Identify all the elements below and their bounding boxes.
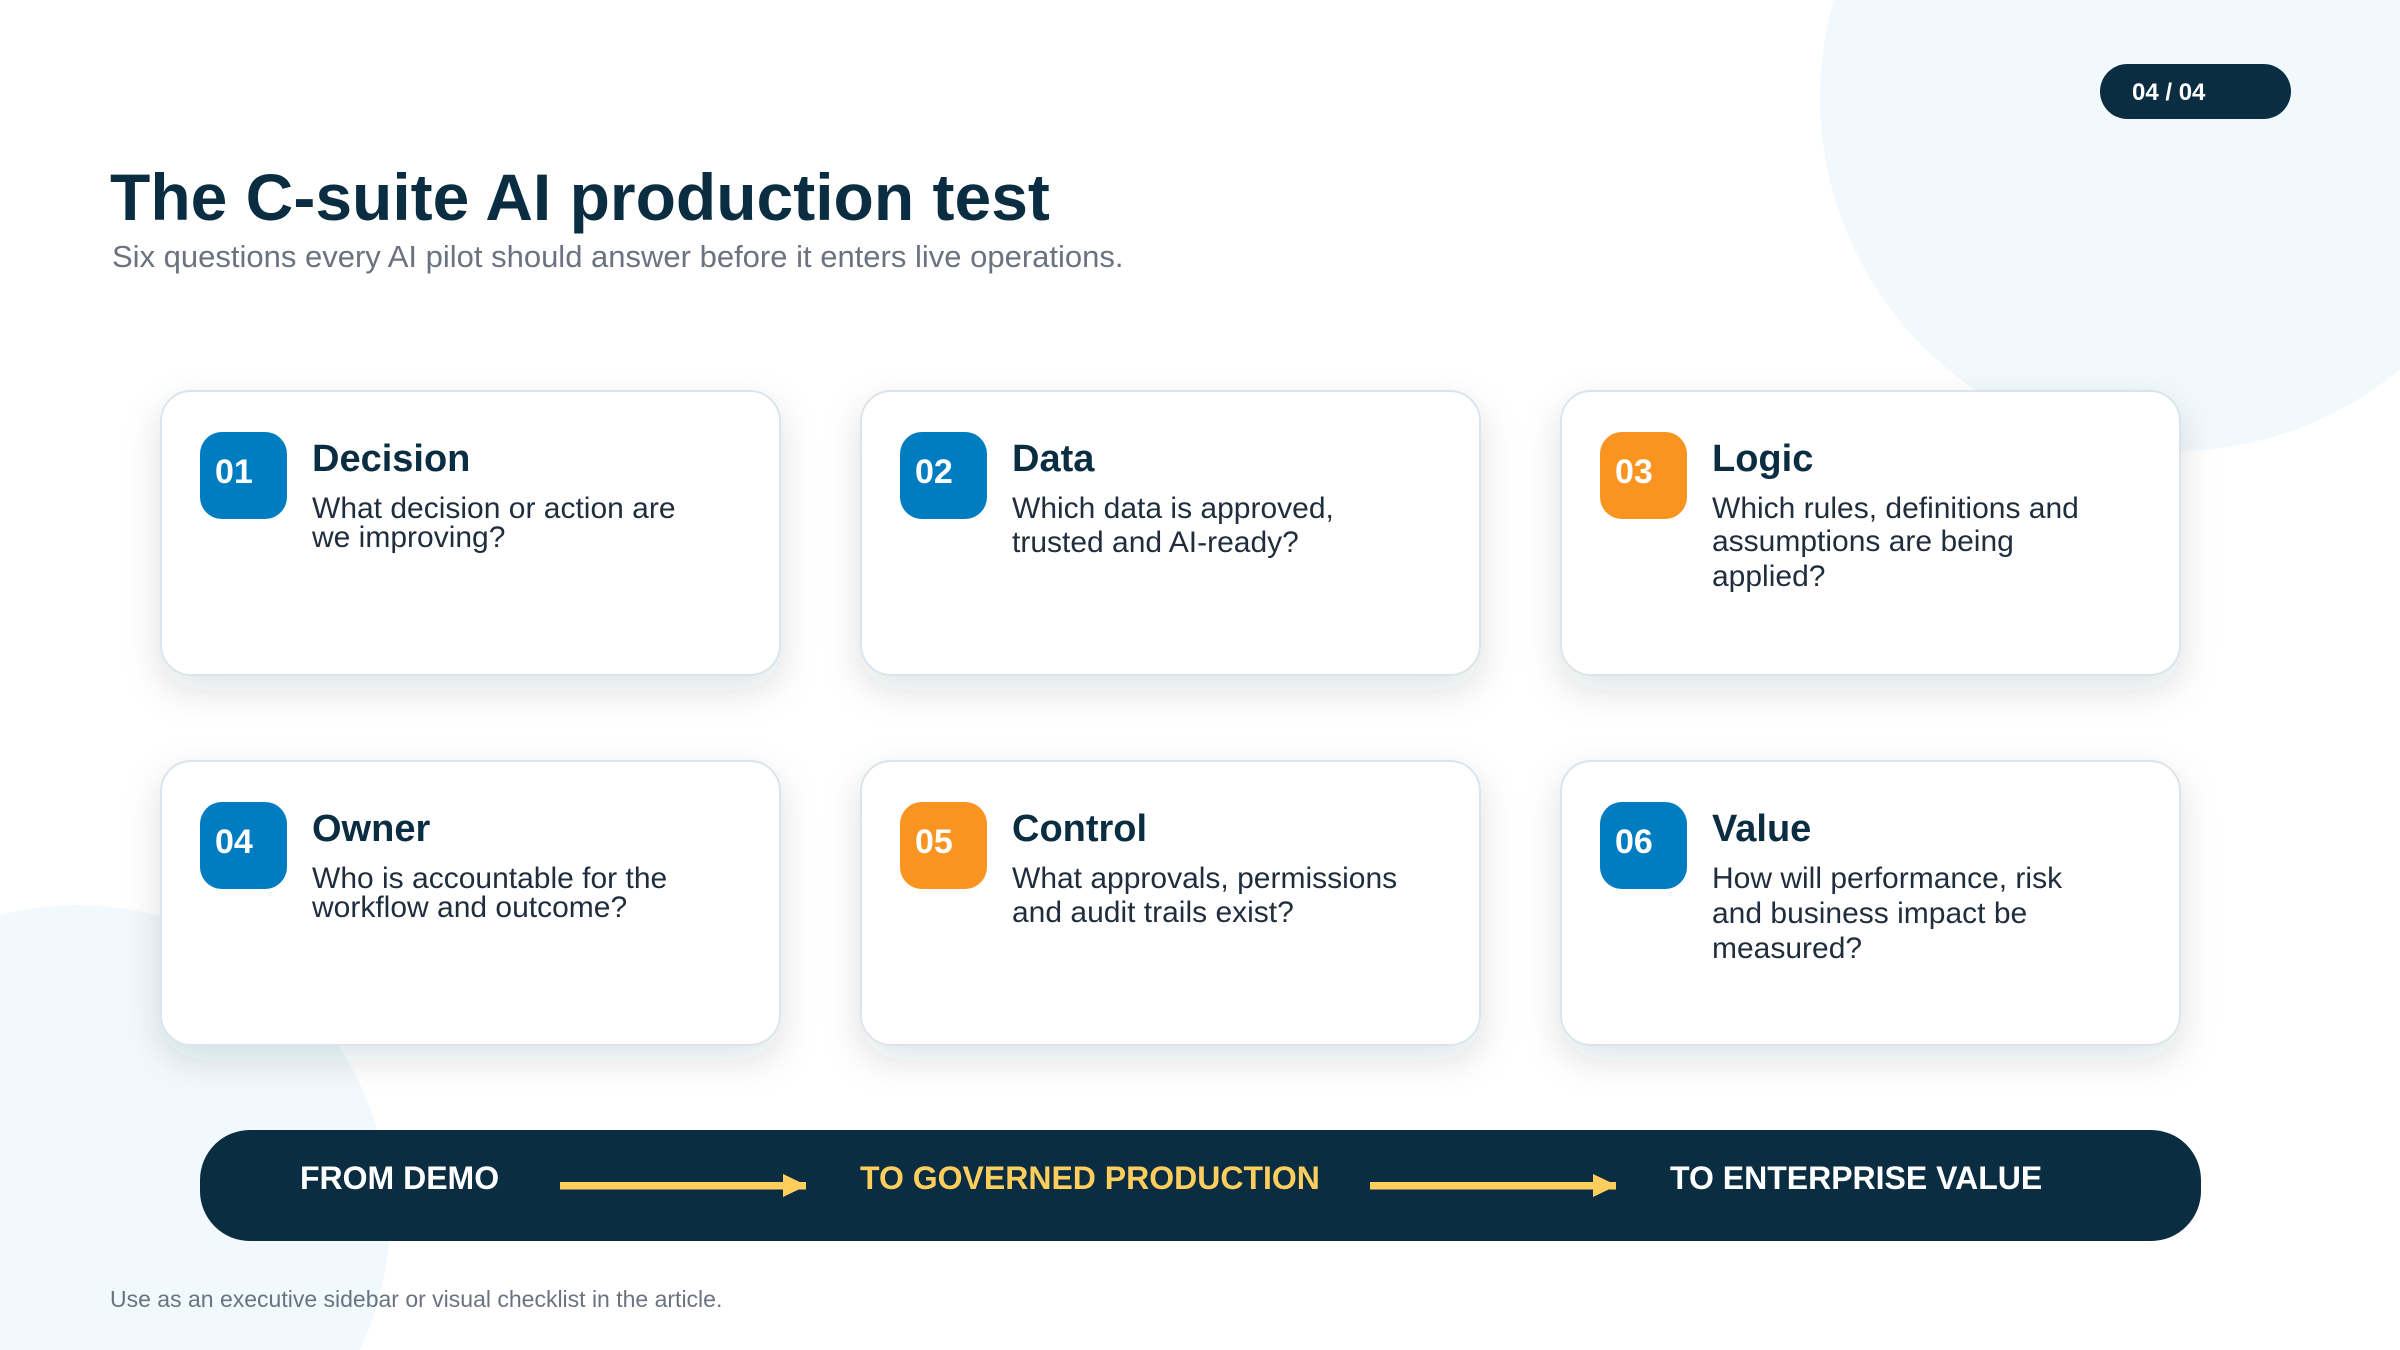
- card: 02 Data: [861, 391, 1480, 675]
- card: 01 Decision: [161, 391, 780, 675]
- card: 03 Logic: 03: [1615, 453, 1653, 491]
- label: to enterprise value: TO ENTERPRISE VALUE: [1670, 1160, 2042, 1196]
- card: 06 Value: How will performance, risk: [1712, 862, 2063, 895]
- arrow 2: [1370, 1174, 1616, 1197]
- card: 03 Logic: [1561, 391, 2180, 675]
- background circle: bottom left: [0, 905, 390, 1350]
- label: to governed production: TO GOVERNED PRODUCTION: [860, 1160, 1320, 1196]
- label: from demo: FROM DEMO: [300, 1160, 499, 1196]
- progression band: [200, 1130, 2201, 1241]
- subtitle: Six questions every AI pilot should answer before it enters live operations.: [112, 239, 1124, 274]
- card: 03 Logic: Which rules, definitions and: [1712, 492, 2079, 525]
- card: 05 Control: Control: [1012, 808, 1147, 850]
- card: 05 Control: [861, 761, 1480, 1045]
- title: The C-suite AI production test: [110, 160, 1050, 234]
- card: 06 Value: measured?: [1712, 932, 1862, 965]
- card: 02 Data: 02: [915, 453, 953, 491]
- card: 03 Logic: assumptions are being: [1712, 525, 2014, 558]
- page pill: [2100, 64, 2291, 119]
- card: 03 Logic: applied?: [1712, 560, 1825, 593]
- card: 06 Value: and business impact be: [1712, 897, 2027, 930]
- page pill: 04 / 04: [2132, 79, 2206, 106]
- card: 01 Decision: Decision: [312, 438, 470, 480]
- card: 03 Logic: Logic: [1712, 438, 1813, 480]
- card: 02 Data: Data: [1012, 438, 1095, 480]
- card: 04 Owner: 04: [215, 823, 253, 861]
- card: 06 Value: Value: [1712, 808, 1811, 850]
- card: 04 Owner: [161, 761, 780, 1045]
- card: 06 Value: 06: [1615, 823, 1653, 861]
- card: 01 Decision: 01: [215, 453, 253, 491]
- footer note: Use as an executive sidebar or visual checklist in the article.: [110, 1286, 722, 1312]
- background circle: top right: [1820, 0, 2400, 451]
- card: 04 Owner: Owner: [312, 808, 430, 850]
- card: 05 Control: 05: [915, 823, 953, 861]
- arrow 1: [560, 1174, 806, 1197]
- card: 06 Value: [1561, 761, 2180, 1045]
- card: 04 Owner: workflow and outcome?: [311, 891, 627, 924]
- card: 02 Data: trusted and AI-ready?: [1012, 526, 1299, 559]
- card: 04 Owner: Who is accountable for the: [312, 862, 667, 895]
- card: 01 Decision: What decision or action are: [312, 492, 676, 525]
- card: 02 Data: Which data is approved,: [1012, 492, 1334, 525]
- card: 05 Control: and audit trails exist?: [1012, 896, 1294, 929]
- card: 05 Control: What approvals, permissions: [1012, 862, 1397, 895]
- card: 01 Decision: we improving?: [311, 521, 505, 554]
